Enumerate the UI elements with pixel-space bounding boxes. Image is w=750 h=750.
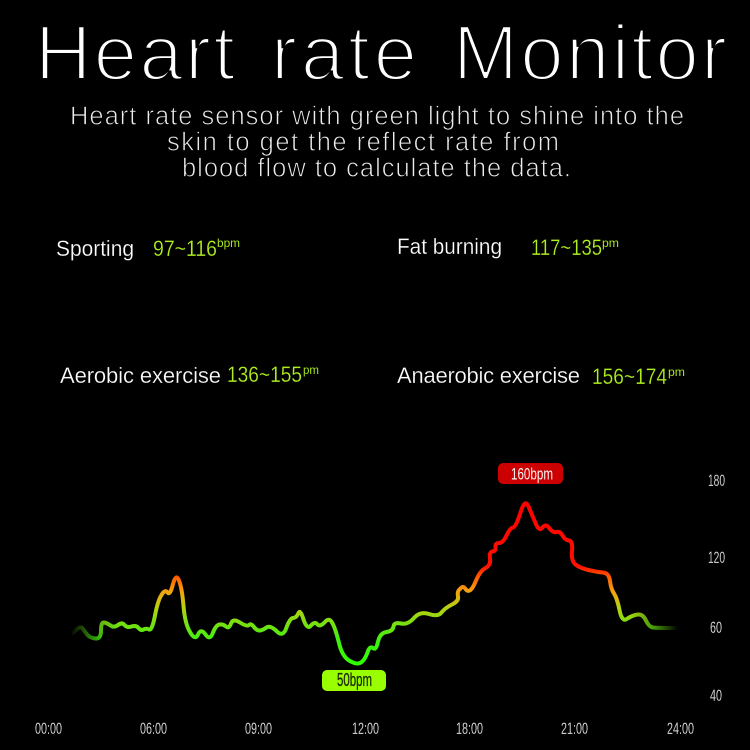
zone: aerobic exercise <box>60 362 319 388</box>
heart rate line chart <box>73 503 675 664</box>
zone: anaerobic exercise: pm <box>668 365 685 379</box>
zone: fat burning <box>397 234 619 260</box>
description text: blood flow to calculate the data. <box>182 154 571 182</box>
title: Heart <box>35 8 235 96</box>
callout: 50bpm minimum <box>322 670 386 691</box>
zone: sporting: Sporting <box>56 236 134 261</box>
zone: sporting: 97~116 <box>153 236 217 261</box>
zone: fat burning: pm <box>602 236 619 250</box>
callout: 160bpm maximum <box>498 463 563 484</box>
x axis labels: 24:00 <box>667 719 694 738</box>
x axis labels: 21:00 <box>561 719 588 738</box>
title: Monitor <box>453 8 727 96</box>
zone: aerobic exercise: Aerobic exercise <box>60 363 221 388</box>
title: rate <box>271 8 417 96</box>
y axis labels: 60 <box>710 618 722 637</box>
zone: fat burning: Fat burning <box>397 234 502 259</box>
y axis labels: 120 <box>708 548 725 567</box>
zone: aerobic exercise: pm <box>303 363 319 377</box>
x axis labels: 12:00 <box>352 719 379 738</box>
title <box>35 8 727 96</box>
x axis labels: 09:00 <box>245 719 272 738</box>
description text <box>70 102 684 182</box>
description text: skin to get the reflect rate from <box>167 128 559 156</box>
zone: sporting: bpm <box>217 236 240 250</box>
y axis labels: 180 <box>708 471 725 490</box>
zone: sporting <box>56 236 240 261</box>
zone: anaerobic exercise: Anaerobic exercise <box>397 363 580 388</box>
description text: Heart rate sensor with green light to shine into the <box>70 102 684 130</box>
callout: 160bpm maximum: 160bpm <box>511 464 553 484</box>
zone: anaerobic exercise: 156~174 <box>592 364 667 389</box>
x axis labels <box>35 719 694 738</box>
x axis labels: 06:00 <box>140 719 167 738</box>
zone: fat burning: 117~135 <box>531 235 602 260</box>
y axis labels <box>708 471 725 705</box>
x axis labels: 00:00 <box>35 719 62 738</box>
x axis labels: 18:00 <box>456 719 483 738</box>
y axis labels: 40 <box>710 686 722 705</box>
zone: aerobic exercise: 136~155 <box>227 362 302 387</box>
callout: 50bpm minimum: 50bpm <box>337 670 372 690</box>
zone: anaerobic exercise <box>397 363 685 389</box>
